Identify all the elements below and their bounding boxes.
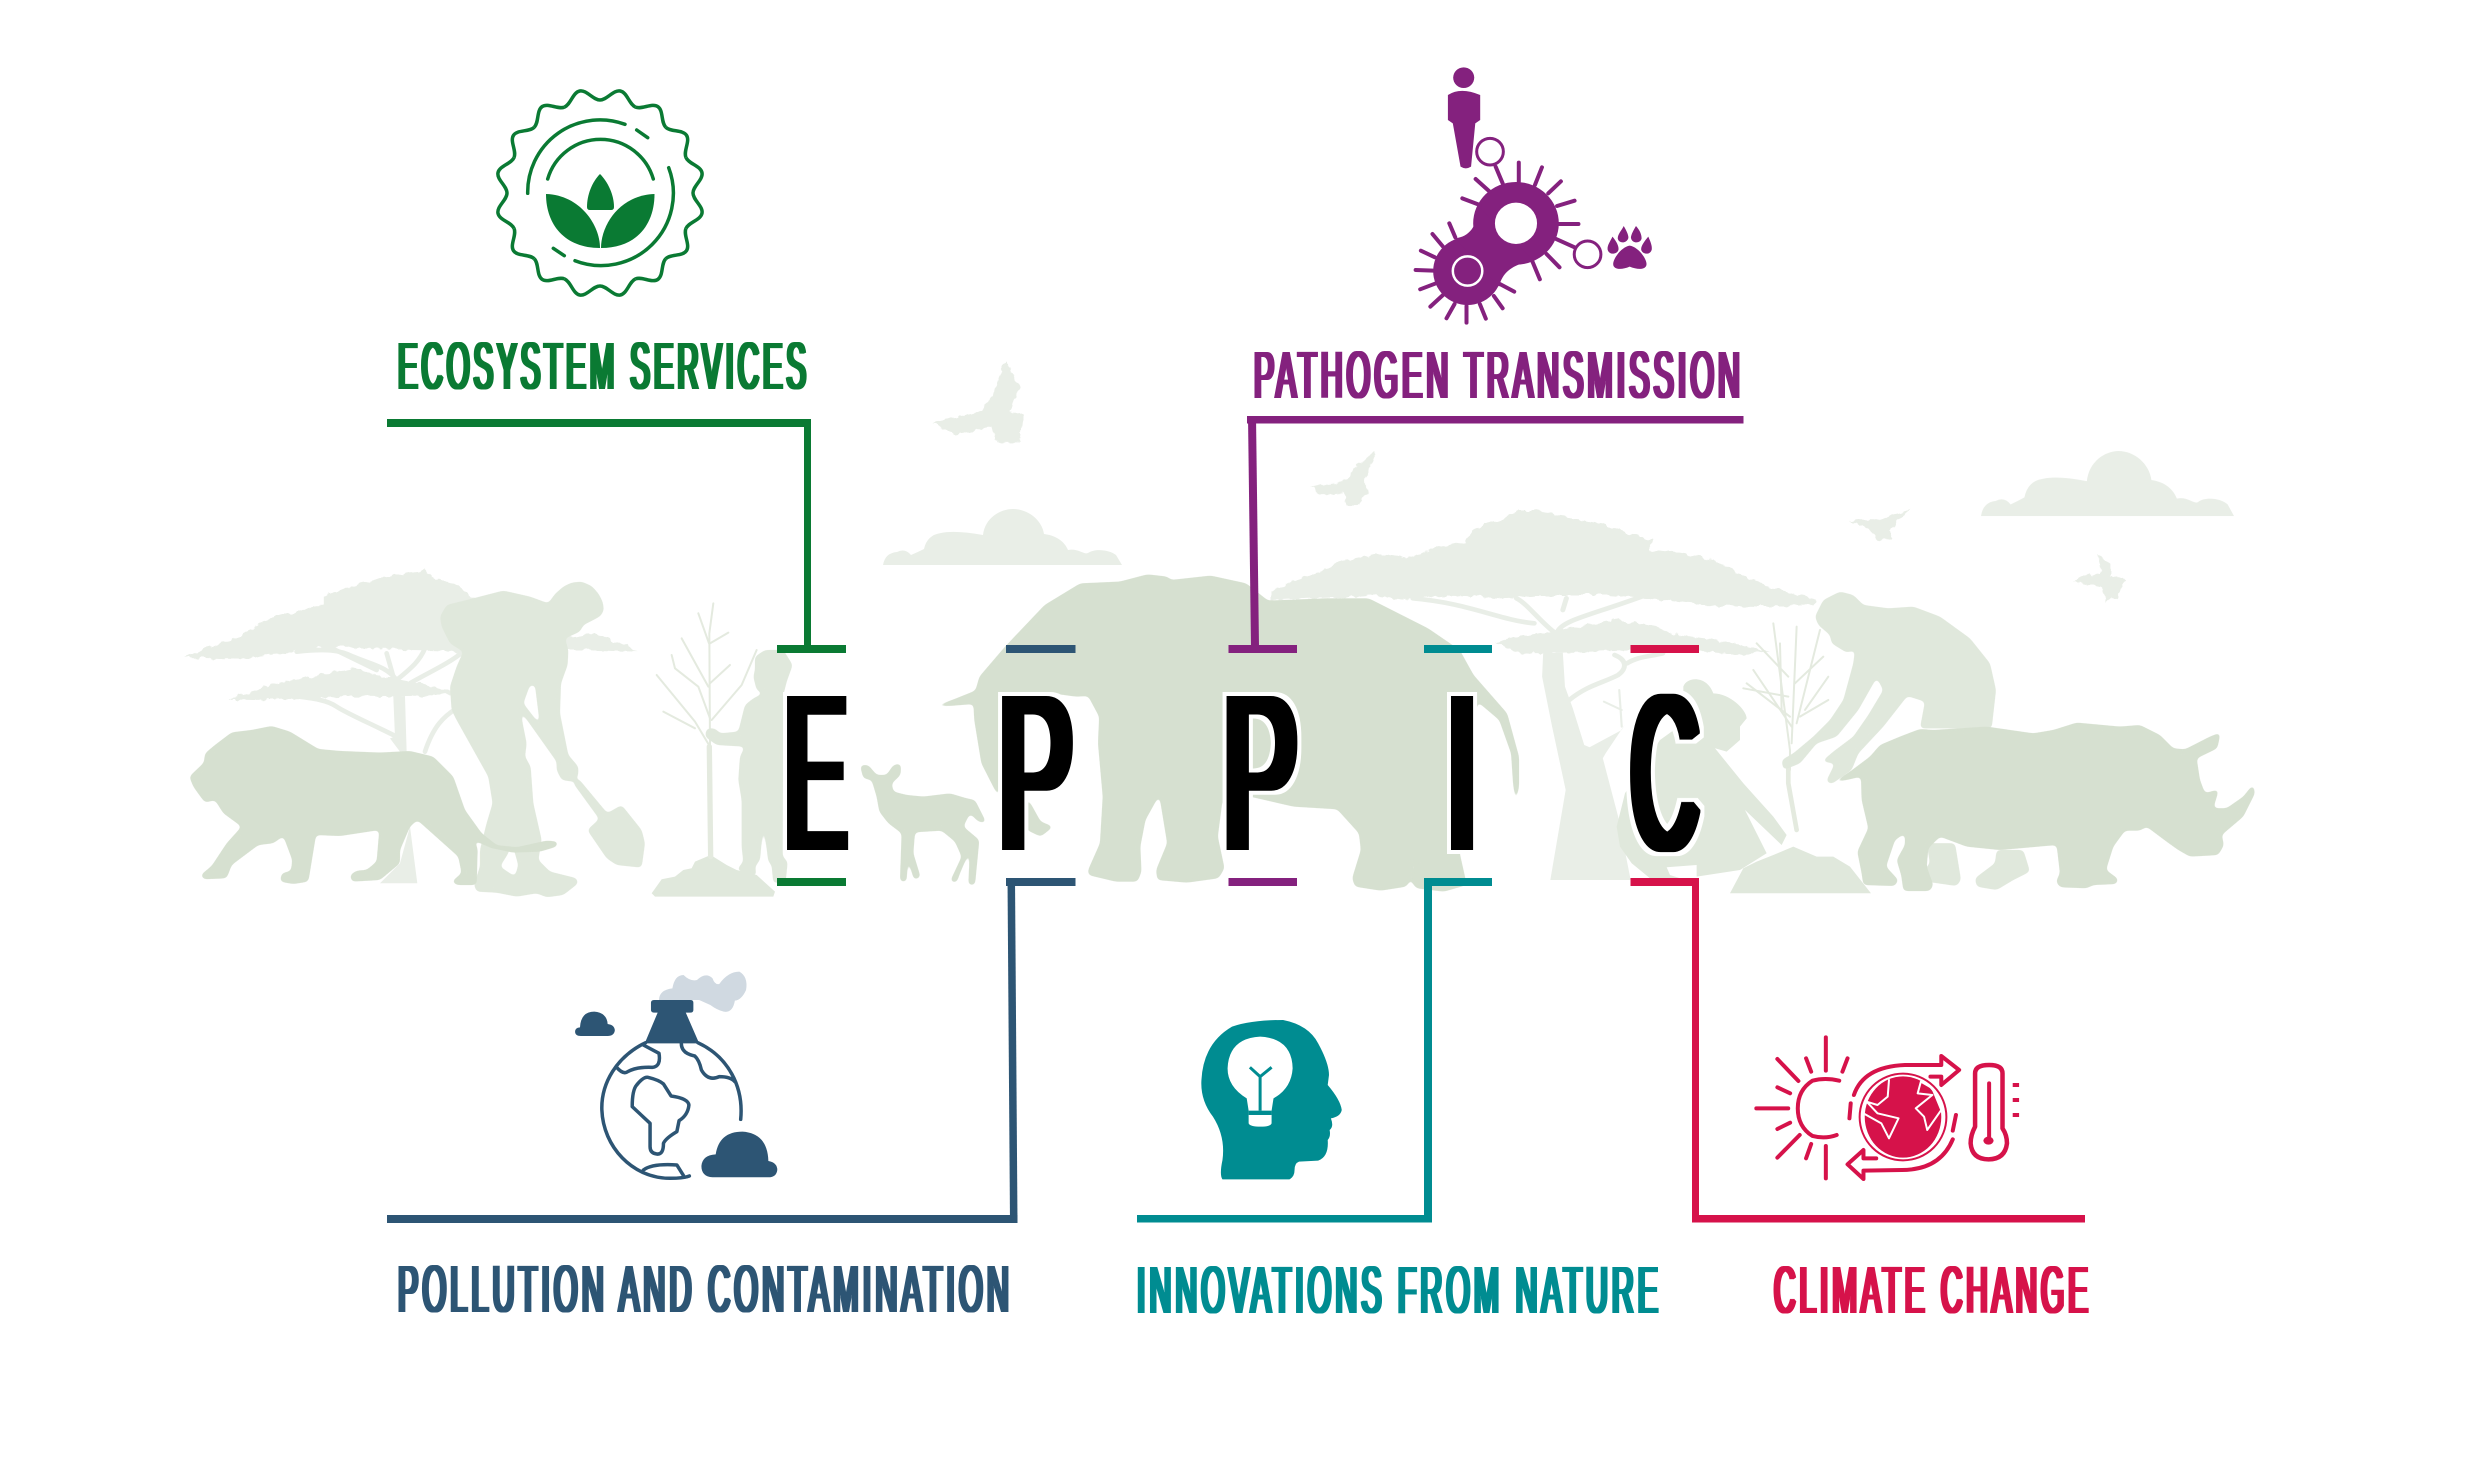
lion xyxy=(189,726,558,885)
chimney xyxy=(645,1000,699,1043)
text: PATHOGEN TRANSMISSION xyxy=(1254,338,1744,413)
title letters: EPPIC: P xyxy=(999,650,1073,897)
text: ECOSYSTEM SERVICES xyxy=(398,329,810,404)
connector: climate change (crimson) xyxy=(1630,645,2085,1222)
icon: climate change sun, earth, thermometer xyxy=(1756,1037,2019,1179)
connector: ecosystem services (green) xyxy=(387,419,846,886)
thermometer xyxy=(1971,1065,2019,1159)
text: INNOVATIONS FROM NATURE xyxy=(1137,1253,1662,1328)
icon: polluted globe with chimney and clouds xyxy=(575,972,777,1178)
child holding sapling xyxy=(705,650,793,883)
clouds xyxy=(575,1012,777,1177)
earth xyxy=(1860,1074,1946,1160)
elephant xyxy=(931,574,1519,892)
background: savanna silhouettes xyxy=(185,361,2255,897)
text: CLIMATE CHANGE xyxy=(1774,1253,2092,1328)
acacia tree centre-right xyxy=(1270,510,1816,880)
clouds xyxy=(883,451,2234,565)
acacia tree left xyxy=(185,570,637,883)
deer xyxy=(860,763,987,885)
animal paw xyxy=(1608,226,1652,269)
icon: head with light bulb xyxy=(1201,1020,1342,1179)
icon: ecosystem badge with leaves xyxy=(492,85,708,301)
sun and rays xyxy=(1756,1037,1848,1178)
virus spikes xyxy=(1416,163,1578,323)
rhinoceros xyxy=(1832,723,2255,891)
man digging with shovel xyxy=(440,582,645,897)
icon: pathogen transmission between human and animal xyxy=(1416,67,1652,323)
birds xyxy=(932,361,2126,601)
rotating arrows xyxy=(1848,1056,1959,1179)
sapling and mound, left xyxy=(652,603,775,897)
smoke xyxy=(659,972,746,1012)
kneeling planter xyxy=(1617,623,1871,893)
connector: pollution and contamination (navy) xyxy=(387,645,1076,1223)
connector: innovations from nature (teal) xyxy=(1137,645,1492,1222)
human figure xyxy=(1448,67,1480,168)
standing planter xyxy=(1782,592,2030,890)
globe outline xyxy=(602,1043,741,1178)
virus body xyxy=(1433,182,1559,305)
title letters: EPPIC: C xyxy=(1631,649,1698,896)
title letters: EPPIC: P xyxy=(1224,650,1297,897)
title letters: EPPIC xyxy=(786,648,1698,897)
text: POLLUTION AND CONTAMINATION xyxy=(398,1252,1013,1327)
title letters: EPPIC: E xyxy=(786,649,846,896)
title letters: EPPIC: I xyxy=(1447,648,1477,896)
connector: pathogen transmission (purple) xyxy=(1228,416,1744,886)
transmission circles xyxy=(1477,138,1601,268)
